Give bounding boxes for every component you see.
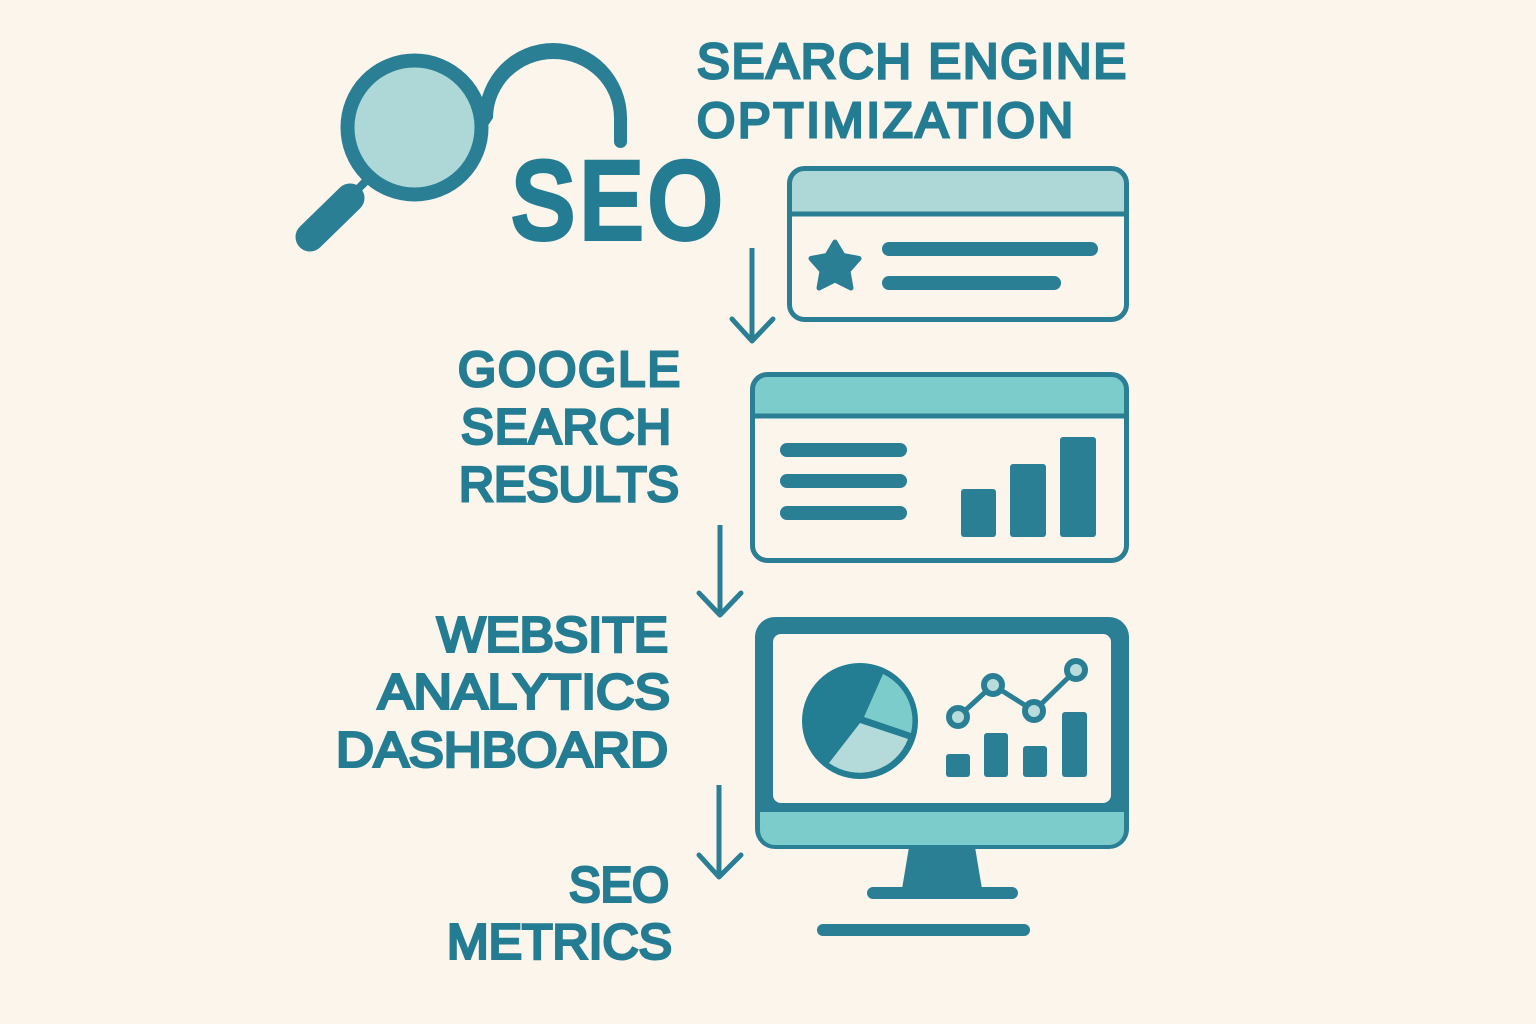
- arrow: results to analytics: [699, 525, 741, 615]
- heading: search engine optimization: SEARCH ENGINE: [697, 35, 1126, 89]
- monitor stand: [867, 847, 1018, 899]
- heading: search engine optimization: OPTIMIZATION: [697, 94, 1073, 148]
- bar chart: [961, 437, 1096, 537]
- panel: results window: [752, 374, 1126, 560]
- label: website analytics dashboard: [336, 608, 670, 778]
- logo text: SEO: SEO: [512, 140, 722, 261]
- label: website analytics dashboard: DASHBOARD: [336, 724, 668, 778]
- icon: star: [811, 242, 859, 288]
- monitor body: [755, 617, 1129, 849]
- label: google search results: [458, 343, 680, 512]
- icon: magnifying glass with arc: [310, 43, 627, 237]
- decorative underline bar: [817, 924, 1030, 936]
- arrow: card to results: [732, 248, 773, 341]
- pie chart: [802, 663, 918, 779]
- text lines: [780, 443, 907, 520]
- monitor chin: [760, 812, 1124, 845]
- panel: search result card: [789, 168, 1126, 320]
- label: google search results: SEARCH: [461, 400, 671, 454]
- arrow: analytics to metrics: [699, 785, 741, 877]
- label: seo metrics: METRICS: [447, 916, 672, 970]
- label: website analytics dashboard: WEBSITE: [437, 608, 668, 662]
- heading: search engine optimization: [697, 35, 1126, 148]
- icon: monitor dashboard: [755, 617, 1129, 899]
- label: seo metrics: [447, 858, 672, 970]
- label: website analytics dashboard: ANALYTICS: [378, 666, 670, 720]
- text lines: [882, 242, 1098, 290]
- monitor screen: [773, 634, 1111, 803]
- label: google search results: GOOGLE: [458, 343, 680, 397]
- line chart: [949, 661, 1085, 726]
- label: seo metrics: SEO: [569, 858, 669, 912]
- label: google search results: RESULTS: [459, 458, 679, 512]
- small bar chart: [946, 712, 1087, 777]
